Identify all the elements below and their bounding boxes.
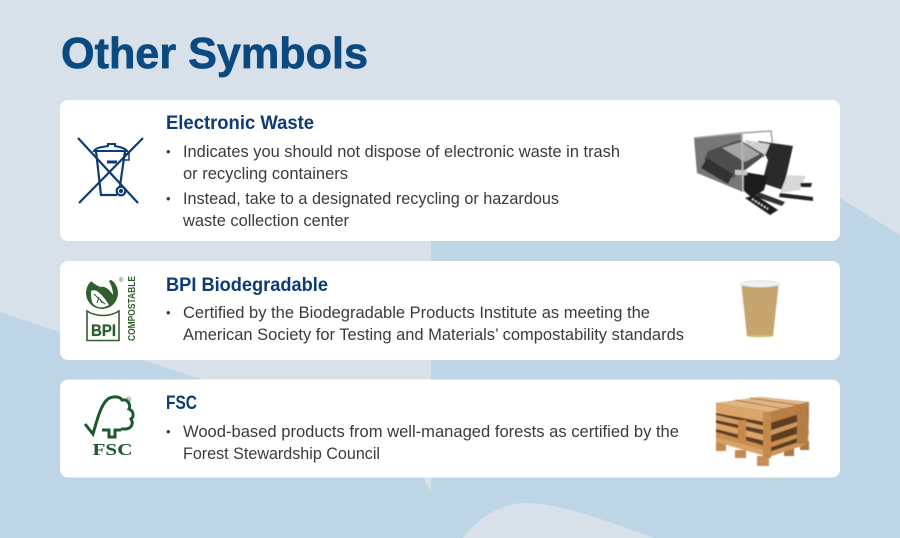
photo: paper cup [740,281,780,337]
card background [60,100,840,241]
heading: BPI biodegradable: BPI Biodegradable [166,275,328,296]
text: electronic waste bullets: Indicates you should not dispose of electronic waste in trash [183,142,620,161]
text: FSC bullet: Forest Stewardship Council [183,444,380,463]
text: electronic waste bullets: Instead, take to a designated recycling or hazardous [183,189,559,208]
icon: crossed-out wheelie bin [78,138,143,203]
icon: BPI compostable logo [86,276,138,341]
photo: stacked wooden pallets [716,397,809,466]
card background [60,261,840,360]
text: FSC bullet [166,422,679,463]
text: electronic waste bullets [166,142,620,230]
icon: FSC checkmark tree logo: FSC [92,440,132,459]
icon: FSC checkmark tree logo [85,396,133,459]
icon: BPI compostable logo: ® [119,277,124,284]
heading: FSC: FSC [166,393,197,414]
icon: BPI compostable logo: COMPOSTABLE [127,276,138,341]
text: FSC bullet: • [166,424,171,439]
photo: bin of electronics [694,131,813,215]
icon: FSC checkmark tree logo: ® [126,396,132,404]
text: electronic waste bullets: or recycling containers [183,164,348,183]
panel: electronic waste [60,100,840,241]
text: BPI bullet [166,303,684,344]
text: BPI bullet: Certified by the Biodegradable Products Institute as meeting the [183,303,650,322]
text: electronic waste bullets: • [166,144,171,159]
icon: BPI compostable logo: BPI [91,322,116,340]
text: electronic waste bullets: waste collection center [182,211,349,230]
text: electronic waste bullets: • [166,191,171,206]
text: BPI bullet: • [166,305,171,320]
panel: BPI biodegradable [60,261,840,360]
card background [60,380,840,478]
panel: FSC [60,380,840,478]
title: Other Symbols [61,29,368,78]
text: BPI bullet: American Society for Testing and Materials’ compostability standards [183,325,684,344]
text: FSC bullet: Wood-based products from well-managed forests as certified by the [183,422,679,441]
heading: electronic waste: Electronic Waste [166,113,314,134]
